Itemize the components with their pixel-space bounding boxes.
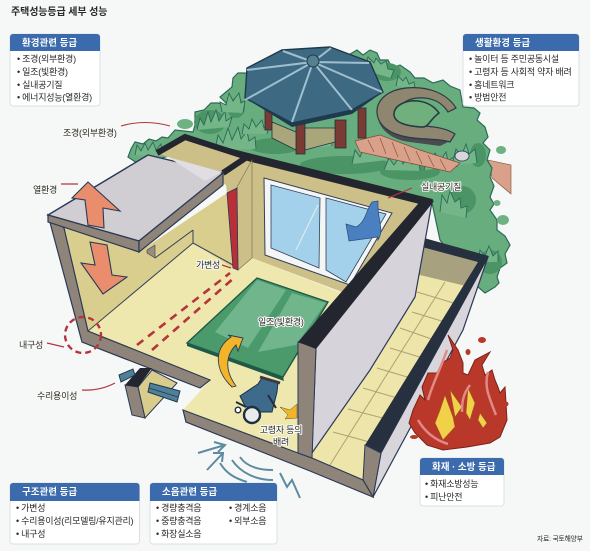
panel: fire grade — [420, 458, 504, 506]
left side wall — [64, 193, 233, 331]
brick path — [355, 135, 460, 172]
title: 주택성능등급 세부 성능 — [11, 5, 107, 18]
red dashed circle — [65, 317, 101, 353]
label: thermal — [33, 184, 78, 195]
label: indoor air: 실내공기질 — [421, 181, 461, 192]
illustration: house — [48, 137, 489, 498]
foliage dark patches — [194, 63, 502, 274]
panel: structure grade: 구조관련 등급 — [22, 486, 77, 498]
label: elderly — [260, 424, 302, 447]
pergola columns — [265, 108, 366, 154]
brick path right edge — [488, 160, 511, 194]
panel: environment grade: • 조경(외부환경) — [17, 53, 76, 64]
rear wall with window — [244, 152, 430, 295]
panel: sound grade: • 외부소음 — [229, 515, 266, 526]
panel: structure grade: • 가변성 — [16, 503, 45, 513]
red dashed lines — [137, 273, 235, 350]
label: elderly: 고령자 등의 — [260, 424, 302, 435]
red variable wall — [227, 188, 238, 270]
small yellow arrow — [280, 404, 297, 419]
panel: fire grade: 화재 · 소방 등급 — [432, 461, 496, 473]
salmon up arrow — [72, 182, 120, 228]
sound waves — [198, 442, 300, 498]
panel: fire grade: • 화재소방성능 — [425, 479, 478, 489]
label: flexibility — [196, 260, 231, 270]
foliage backdrop — [128, 50, 510, 293]
panel: living environment grade: • 홈네트워크 — [469, 79, 514, 90]
label: repairability — [37, 383, 115, 401]
rear-left room — [157, 137, 252, 268]
balcony parapet — [363, 238, 489, 497]
floor — [88, 243, 350, 453]
panel: structure grade: • 내구성 — [16, 529, 45, 539]
floor base — [183, 410, 373, 497]
panel: environment grade: 환경관련 등급 — [22, 37, 77, 49]
label: durability — [19, 340, 64, 350]
panel: fire grade: • 피난안전 — [425, 492, 462, 502]
label: landscape — [63, 122, 170, 138]
panel: sound grade: 소음관련 등급 — [162, 486, 217, 498]
panel: living environment grade: 생활환경 등급 — [475, 37, 530, 49]
salmon down arrow — [81, 242, 127, 294]
label: flexibility: 가변성 — [196, 260, 220, 270]
blue airflow arrow — [346, 201, 381, 241]
label: daylight: 일조(빛환경) — [258, 316, 304, 327]
small rock — [455, 151, 469, 161]
outer structural shell — [48, 215, 210, 388]
label: repairability: 수리용이성 — [37, 391, 77, 401]
wheelchair — [235, 377, 280, 423]
panel: structure grade: • 수리용이성(리모델링/유지관리) — [16, 515, 134, 526]
green mat — [187, 278, 328, 381]
illustration: rooftop garden — [128, 47, 511, 293]
pillar — [237, 160, 252, 270]
panel: environment grade: • 실내공기질 — [17, 79, 62, 90]
label: landscape: 조경(외부환경) — [63, 127, 117, 138]
panel: living environment grade — [463, 34, 579, 106]
label: durability: 내구성 — [19, 340, 43, 350]
pergola roof — [245, 47, 383, 127]
panel: structure grade — [10, 483, 140, 544]
flame — [409, 335, 508, 450]
circular planter — [377, 88, 456, 146]
balcony back wall — [410, 240, 488, 300]
panel: sound grade: • 중량충격음 — [156, 515, 201, 526]
panel: sound grade: • 화장실소음 — [156, 529, 201, 539]
balcony tile floor — [312, 275, 470, 480]
panel: sound grade: • 경계소음 — [229, 502, 266, 513]
panel: environment grade: • 에너지성능(열환경) — [17, 92, 92, 102]
source: 자료: 국토해양부 — [537, 534, 583, 543]
panel: living environment grade: • 고령자 등 사회적 약자 배려 — [469, 66, 571, 77]
panel: living environment grade: • 방범안전 — [469, 92, 506, 102]
label: thermal: 열환경 — [33, 184, 57, 195]
panel: sound grade: • 경량충격음 — [156, 502, 201, 513]
panel: environment grade — [10, 34, 100, 106]
panel: living environment grade: • 놀이터 등 주민공동시설 — [469, 54, 559, 64]
panel: environment grade: • 일조(빛환경) — [17, 66, 68, 77]
tall partition wall — [298, 197, 434, 458]
roof slab — [48, 155, 223, 252]
panel: sound grade — [150, 483, 277, 544]
window — [264, 178, 392, 285]
foliage tufts — [135, 57, 498, 262]
label: elderly: 배려 — [273, 437, 289, 447]
label: indoor air — [388, 181, 461, 198]
yellow curved arrow — [218, 335, 243, 387]
foliage blobs — [177, 119, 509, 225]
repair pillar — [119, 368, 180, 418]
